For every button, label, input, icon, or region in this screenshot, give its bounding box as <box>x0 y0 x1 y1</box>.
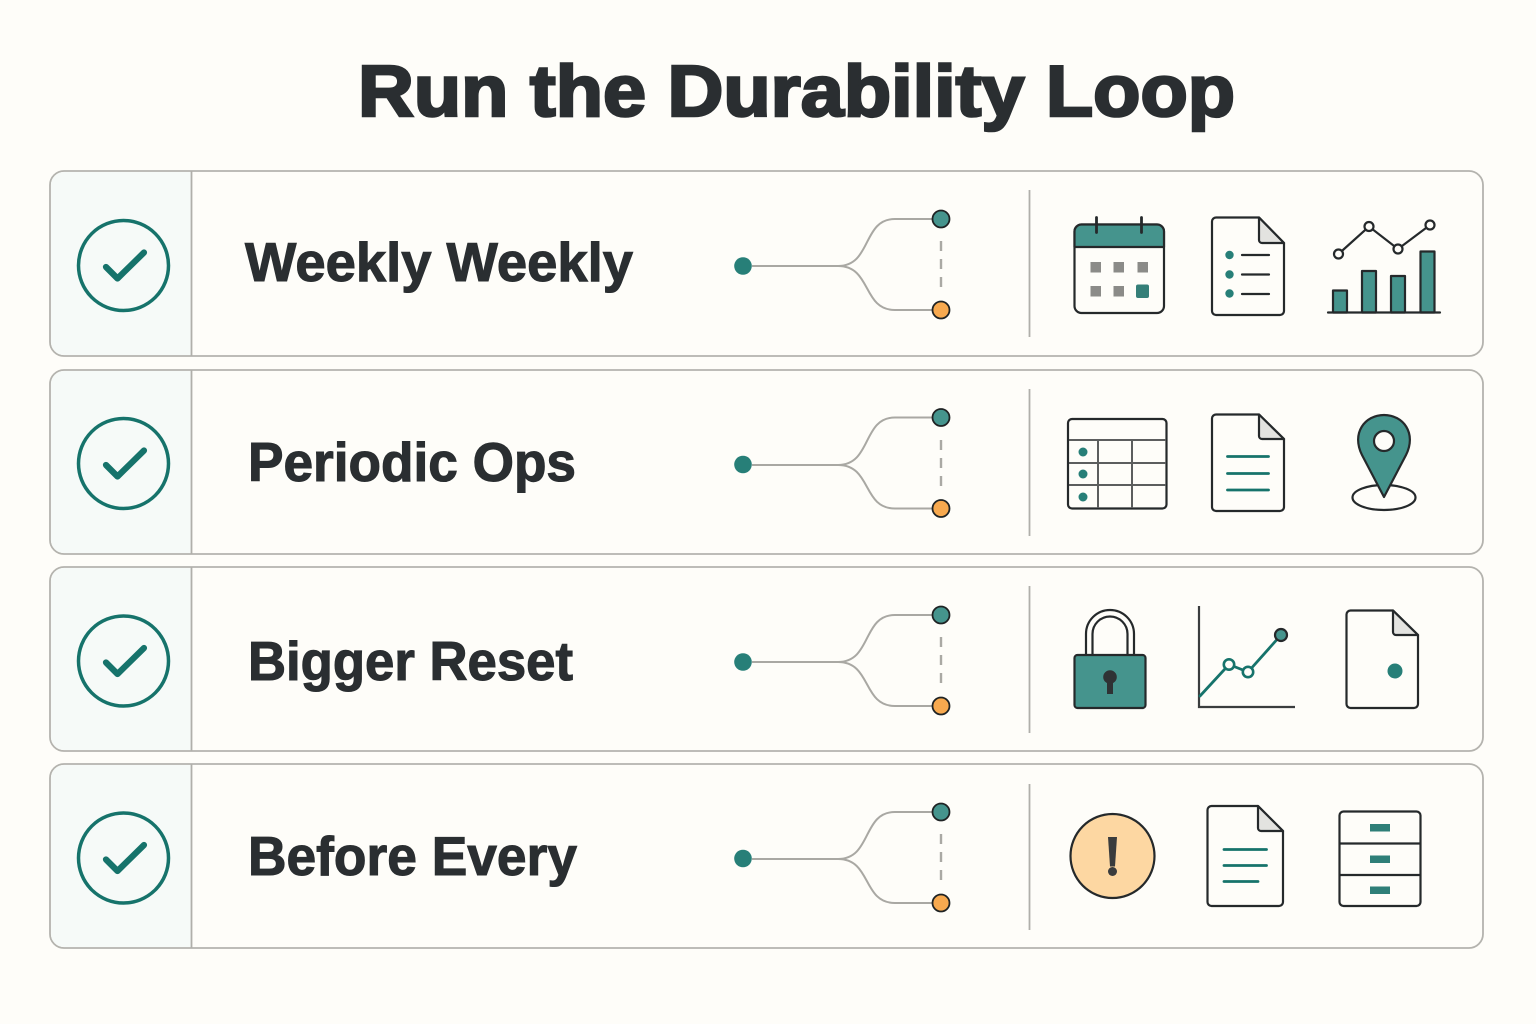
icon: text document <box>1212 414 1284 511</box>
branch connector <box>734 804 950 912</box>
icon: document with dot <box>1346 610 1418 708</box>
panel: Periodic Ops <box>50 370 1483 554</box>
panel: Before Every <box>50 764 1483 948</box>
icon: check mark <box>78 616 168 706</box>
label: Periodic Ops: Periodic Ops <box>248 431 576 493</box>
panel: Weekly Weekly <box>50 171 1483 356</box>
icon: filing cabinet <box>1340 812 1420 906</box>
icon: check mark <box>78 418 168 508</box>
status column <box>51 172 191 355</box>
icon: calendar <box>1074 218 1164 313</box>
title: Run the Durability Loop <box>358 52 1235 132</box>
branch connector <box>734 409 950 517</box>
status column <box>51 371 191 553</box>
icon: check mark <box>78 813 168 903</box>
icon: table <box>1068 419 1166 508</box>
icon: bar and line chart <box>1328 220 1440 312</box>
label: Bigger Reset: Bigger Reset <box>248 630 573 692</box>
icon: warning circle <box>1070 814 1154 898</box>
branch connector <box>734 210 950 318</box>
icon: notes document <box>1208 806 1283 906</box>
icon: check mark <box>78 220 168 310</box>
branch connector <box>734 606 950 714</box>
label: Weekly Weekly: Weekly Weekly <box>245 231 633 293</box>
icon: line graph <box>1199 606 1295 707</box>
label: Before Every: Before Every <box>248 825 577 887</box>
panel: Bigger Reset <box>50 567 1483 751</box>
status column <box>51 568 191 750</box>
icon: location pin <box>1352 415 1416 510</box>
icon: checklist document <box>1212 218 1284 315</box>
icon: padlock <box>1074 610 1146 708</box>
status column <box>51 765 191 947</box>
